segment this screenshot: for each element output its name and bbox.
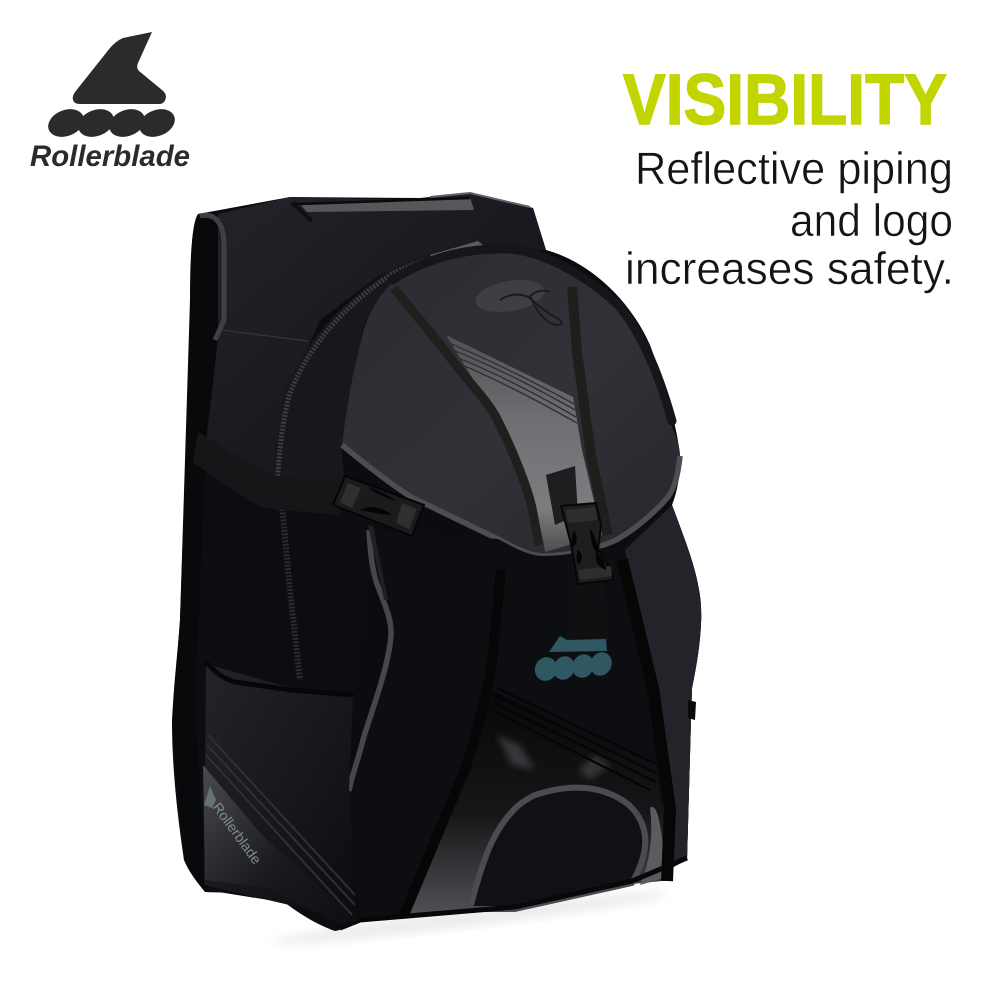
flap right piping	[572, 287, 608, 535]
teal logo	[531, 636, 616, 685]
main zipper	[277, 250, 470, 490]
right piping	[622, 560, 670, 881]
ground shadow	[271, 886, 669, 950]
right lower side panel	[625, 505, 701, 870]
logo: Rollerblade	[30, 32, 190, 173]
zipper pull	[430, 241, 484, 260]
buckle webbing	[368, 525, 388, 600]
text block: description	[625, 143, 954, 294]
right side loop	[688, 700, 696, 720]
side panel seam	[222, 330, 308, 341]
pocket stripes	[206, 735, 355, 915]
pocket logo text: Rollerblade	[210, 799, 265, 867]
flap left piping	[394, 288, 539, 545]
logo skate boot	[73, 32, 166, 104]
pocket logo icon	[204, 786, 216, 808]
center webbing strap	[566, 560, 610, 640]
heading: VISIBILITY: VISIBILITY	[623, 61, 947, 140]
top zipper pocket	[292, 193, 530, 221]
reflective stripes	[449, 343, 577, 423]
flap logo badge	[473, 275, 562, 325]
front zipper gusset	[272, 247, 508, 498]
bottom edge	[340, 858, 687, 928]
flap lower grey binding	[342, 445, 680, 556]
text block: description: Reflective piping	[635, 143, 953, 194]
bottom grey wedge	[640, 807, 664, 885]
upper body panel	[205, 193, 546, 485]
glossy pocket base	[203, 765, 358, 925]
bottom arch pocket	[470, 788, 645, 909]
center piping	[404, 570, 501, 915]
shoulder edge binding	[200, 215, 224, 340]
center strap tab	[546, 466, 578, 525]
bottom gloss panel	[404, 690, 672, 915]
side compression strap	[193, 432, 345, 515]
pocket elastic	[206, 662, 354, 695]
backpack silhouette	[172, 193, 701, 931]
side mesh pocket	[204, 664, 358, 921]
lower side zipper	[281, 495, 300, 680]
gloss stripes	[491, 688, 656, 790]
logo wheels	[44, 104, 179, 142]
product photo: backpack	[172, 193, 701, 950]
center release buckle	[561, 503, 613, 584]
gloss highlights	[497, 735, 610, 780]
reflective grey panel	[446, 335, 602, 552]
text block: description: and logo	[790, 195, 953, 246]
back shoulder strap	[172, 212, 240, 892]
flap top rolled binding	[392, 249, 672, 421]
logo wordmark: Rollerblade	[30, 140, 190, 173]
lower side panel	[195, 450, 375, 925]
text block: description: increases safety.	[625, 243, 954, 294]
front flap	[342, 250, 680, 556]
lower front panel	[349, 505, 701, 922]
side release buckle	[333, 476, 424, 536]
left reflective piping	[349, 530, 391, 791]
